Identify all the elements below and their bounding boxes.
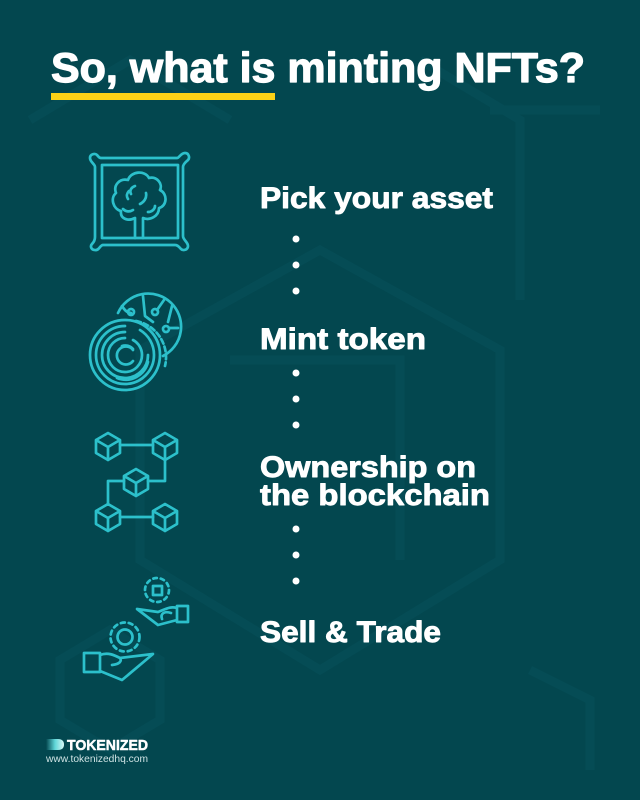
connector dots 1 — [292, 236, 300, 294]
title: So, what is minting NFTs? — [51, 44, 585, 91]
cube top right — [153, 433, 177, 460]
icon: hands trading — [84, 578, 188, 680]
step label: ownership on the blockchain — [260, 451, 490, 512]
icon: coins — [90, 294, 181, 390]
cube middle — [124, 469, 148, 496]
connector dots 2 — [292, 370, 300, 428]
connector dots 3 — [292, 526, 300, 584]
step label: sell and trade: Sell & Trade — [260, 616, 441, 649]
title underline — [51, 93, 275, 100]
icon: blockchain cubes — [96, 433, 177, 531]
step label: ownership on the blockchain: the blockchain — [260, 479, 490, 512]
logo — [46, 737, 148, 754]
icon: framed tree — [90, 153, 189, 250]
step label: pick your asset: Pick your asset — [260, 182, 493, 215]
cube bottom right — [153, 504, 177, 531]
website url: www.tokenizedhq.com — [45, 753, 148, 765]
logo wordmark: TOKENIZED — [67, 737, 148, 754]
step label: mint token: Mint token — [260, 323, 426, 356]
logo mark — [46, 739, 64, 750]
cube bottom left — [96, 504, 120, 531]
cube top left — [96, 433, 120, 460]
step label: ownership on the blockchain: Ownership on — [260, 451, 476, 484]
